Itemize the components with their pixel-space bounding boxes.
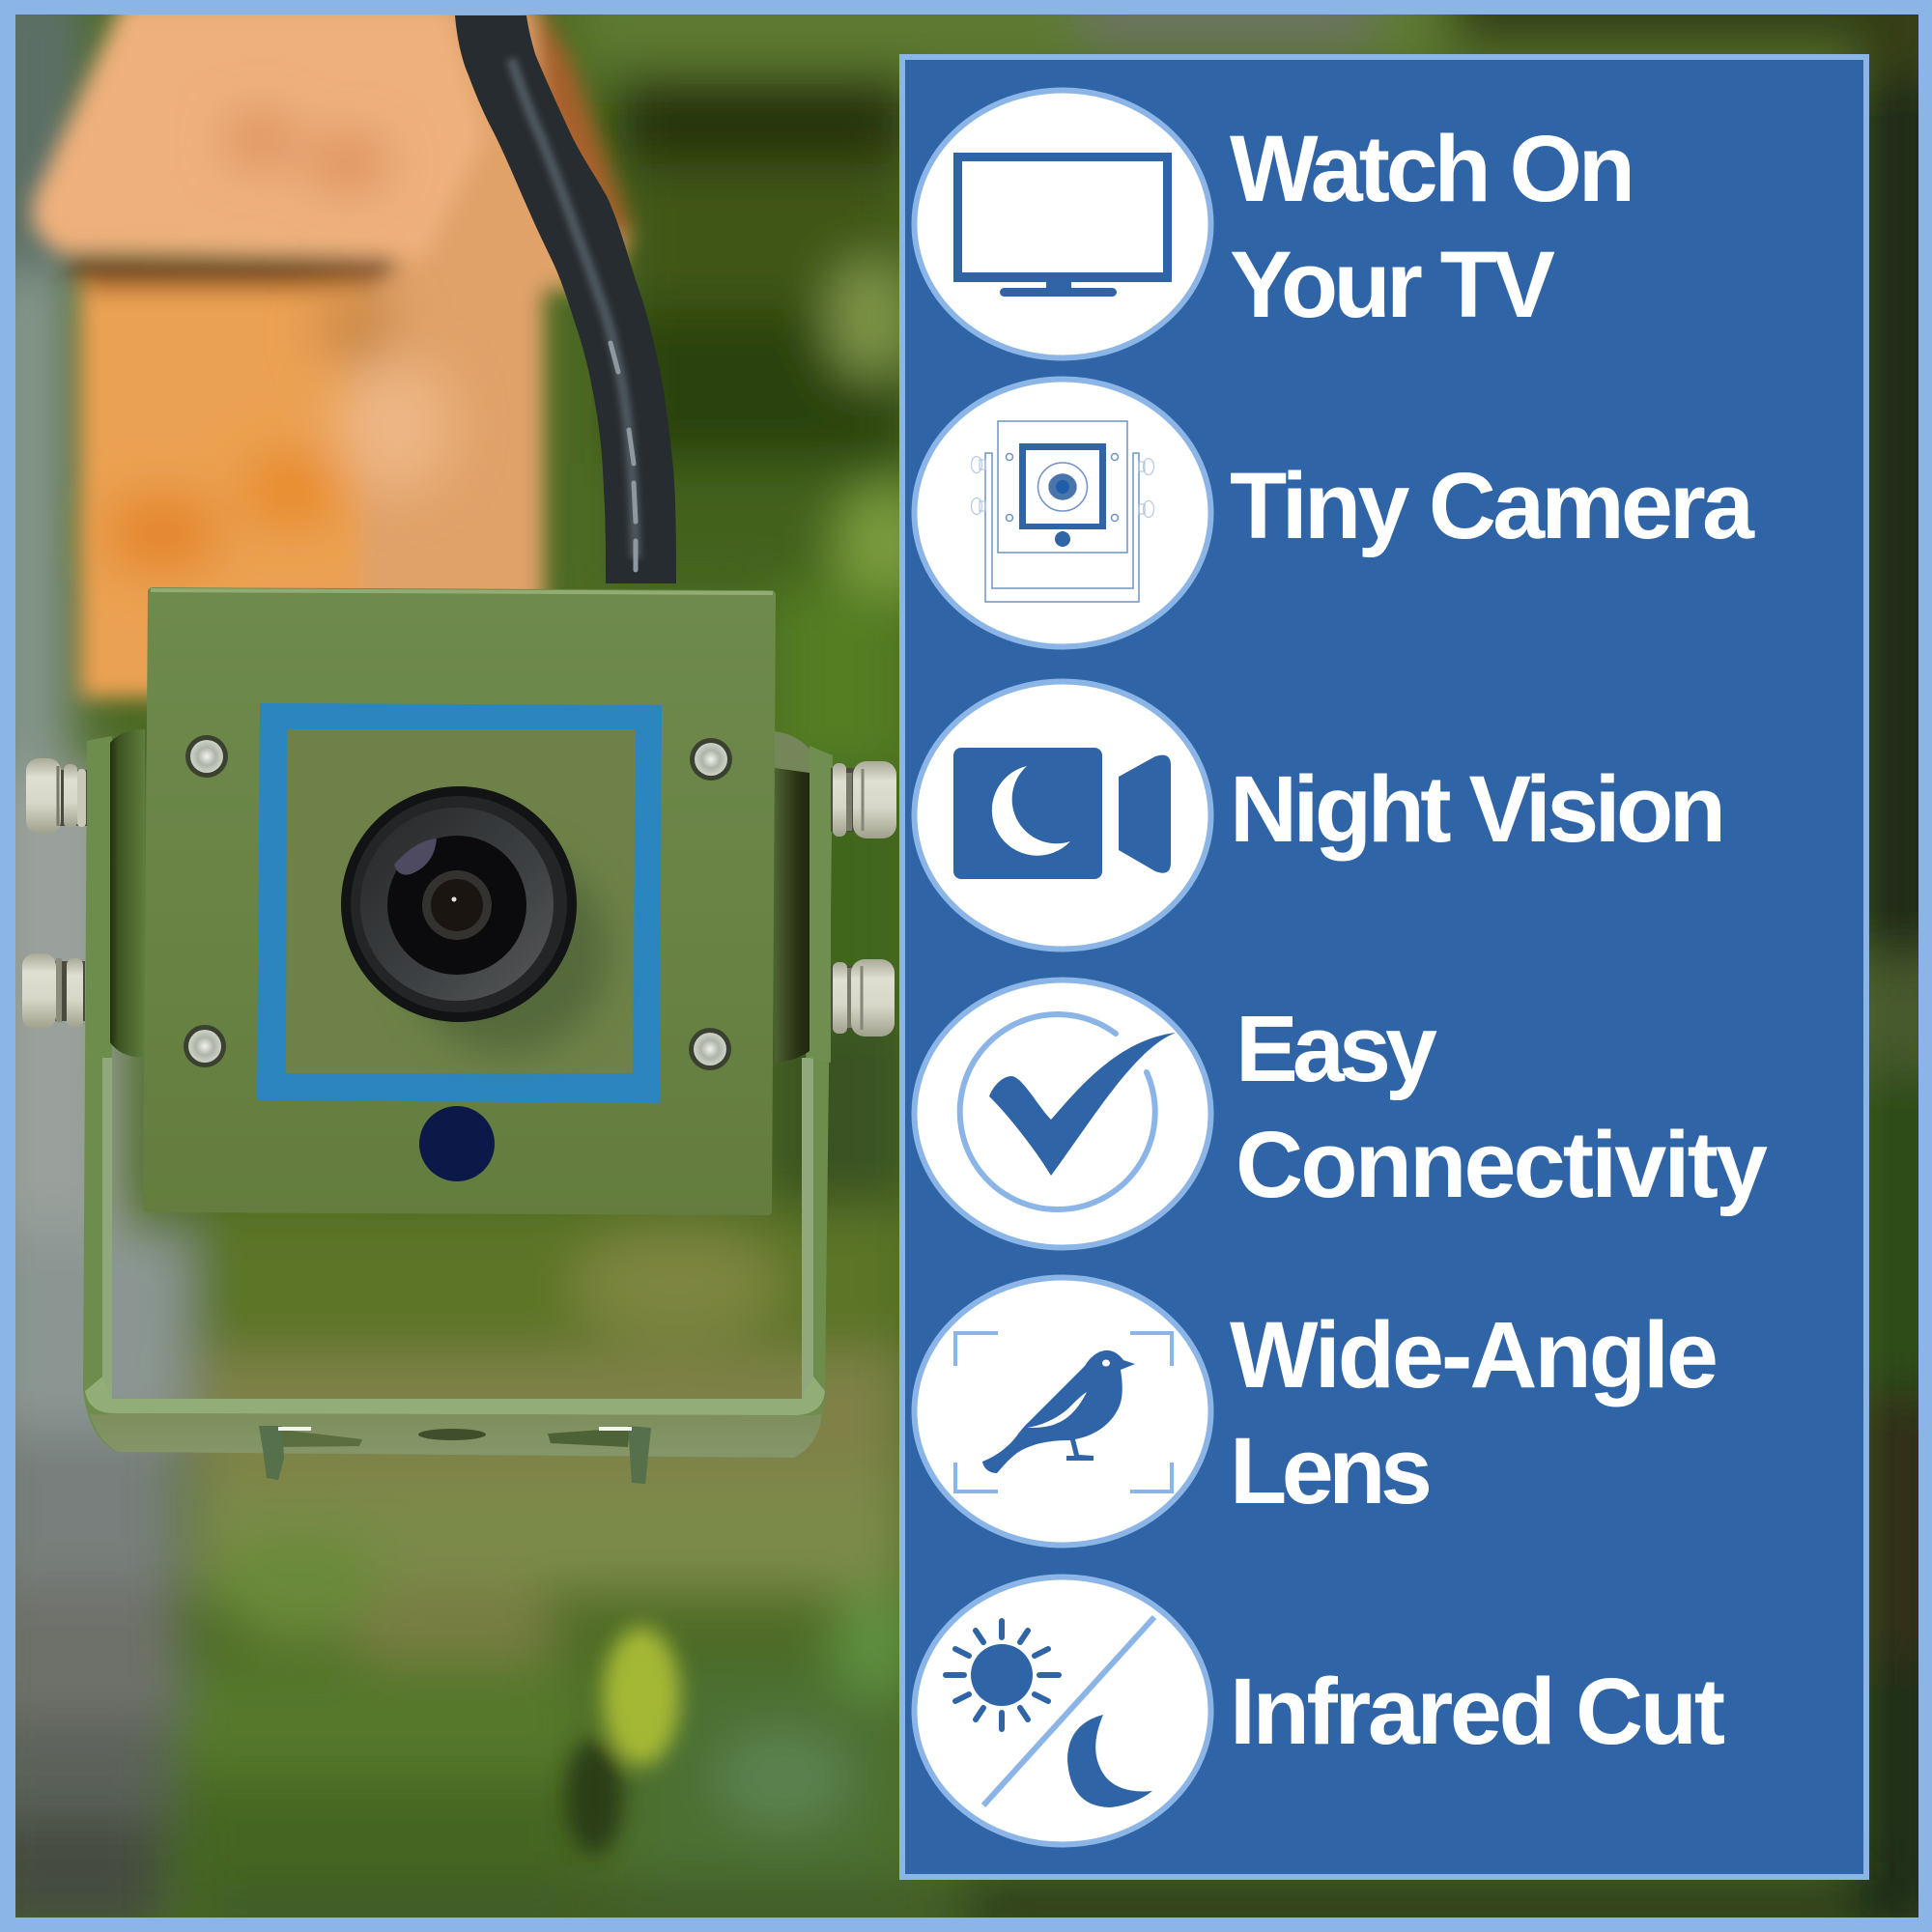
heading: easy connectivity: Connectivity	[1236, 1112, 1768, 1217]
camera: lens	[341, 786, 609, 1053]
heading: watch on your tv: Your TV	[1230, 232, 1555, 337]
heading: easy connectivity	[1236, 996, 1768, 1217]
icon: camera line drawing	[972, 421, 1153, 602]
feature: tiny camera	[914, 379, 1755, 647]
roof shadow	[70, 259, 393, 276]
heading: wide-angle lens: Wide-Angle	[1230, 1302, 1719, 1407]
lower foliage	[174, 1208, 908, 1352]
icon: sun, divider and moon	[946, 1617, 1154, 1807]
feature: easy connectivity	[914, 980, 1768, 1248]
heading: night vision: Night Vision	[1230, 756, 1726, 862]
camera: green housing	[143, 587, 776, 1215]
heading: infrared cut: Infrared Cut	[1230, 1659, 1725, 1764]
heading: easy connectivity: Easy	[1236, 996, 1437, 1101]
bracket bottom highlight	[85, 1377, 825, 1415]
icon: bird in viewfinder	[955, 1333, 1172, 1492]
feature: night vision	[914, 682, 1726, 949]
bracket slots and tabs	[266, 1428, 362, 1447]
heading: watch on your tv: Watch On	[1230, 116, 1635, 221]
far side strips and upper foliage	[580, 0, 1932, 68]
feature: wide-angle lens	[914, 1277, 1719, 1546]
heading: wide-angle lens	[1230, 1302, 1719, 1523]
camera: mounting bracket	[83, 729, 833, 1484]
camera: housing screws	[184, 735, 732, 1070]
bracket side arms and base	[83, 736, 833, 1458]
camera: thumb bolts	[22, 758, 896, 1037]
icon: video camera with moon	[953, 748, 1171, 879]
bracket front face	[89, 1413, 822, 1458]
lower left bolt	[54, 961, 85, 1021]
soft mottling on bird box	[227, 116, 295, 164]
heading: watch on your tv	[1230, 116, 1635, 337]
cable	[455, 15, 676, 583]
lower right bolt	[831, 966, 856, 1030]
right edge strip	[1860, 0, 1932, 87]
side blocks	[109, 729, 145, 1058]
yellow blob and dark patch	[603, 1627, 680, 1766]
inner lighter edges of arms	[102, 1058, 813, 1399]
bird box body	[80, 266, 360, 697]
panel: features	[902, 57, 1866, 1877]
icon: television	[953, 153, 1172, 297]
upper right bolt	[831, 768, 858, 832]
upper left bolt	[60, 770, 87, 826]
camera: infrared sensor	[419, 1106, 495, 1181]
grey post on the left	[0, 0, 87, 290]
feature: infrared cut	[914, 1577, 1725, 1845]
heading: wide-angle lens: Lens	[1230, 1418, 1433, 1523]
camera: blue square bezel	[259, 705, 660, 1101]
icon: check mark in ring	[960, 1014, 1176, 1209]
bird box side wall	[344, 14, 642, 589]
feature: watch on your TV	[914, 91, 1635, 357]
bird box roof	[33, 0, 486, 259]
heading: tiny camera: Tiny Camera	[1230, 453, 1755, 558]
